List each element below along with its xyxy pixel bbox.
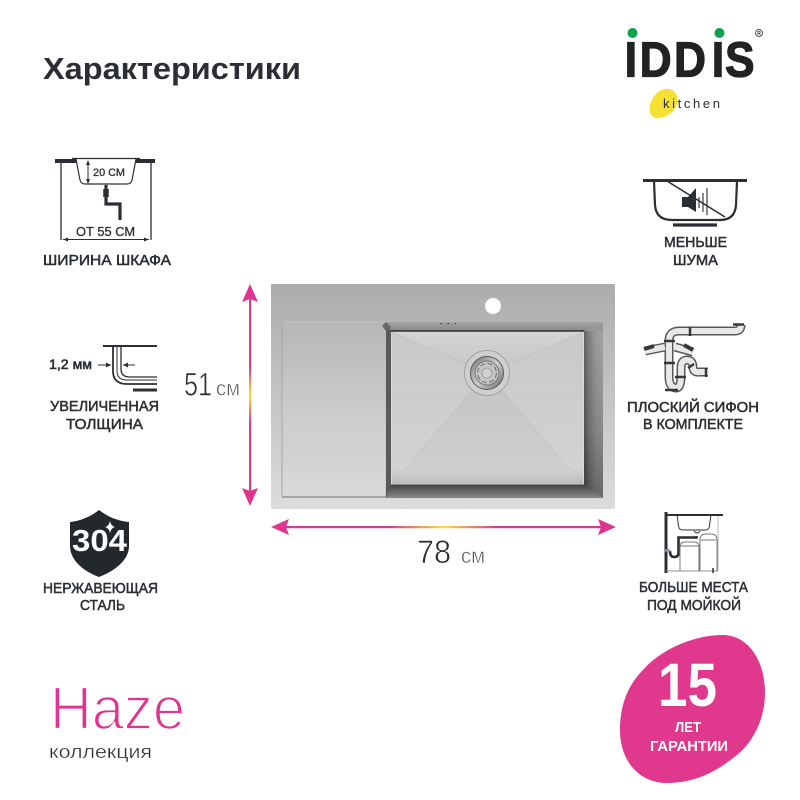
icon: steel profile (98, 346, 157, 390)
caption: collection: коллекция (49, 742, 152, 762)
icon block: flat siphon (627, 324, 759, 433)
sink plate (271, 284, 615, 509)
dimension: height 51 cm: 51 (184, 366, 212, 402)
badge text line 2: ГАРАНТИИ (650, 738, 728, 755)
icon block: more space under sink (639, 512, 748, 614)
dimension: height 51 cm: см (216, 378, 240, 400)
tap hole (485, 298, 501, 314)
logo yellow blob (650, 89, 678, 118)
dimension: width 78 cm (417, 534, 485, 570)
drainboard (282, 322, 386, 497)
title: Характеристики (43, 51, 301, 86)
icon: sparkle (105, 521, 115, 533)
bowl walls (382, 322, 603, 498)
badge: 15 year warranty (620, 635, 765, 783)
logo green dots (628, 28, 724, 38)
dimension: 20 cm: 20 СМ (93, 167, 125, 179)
label line 2: В КОМПЛЕКТЕ (643, 417, 743, 433)
label line 2: ШУМА (673, 253, 718, 269)
product: sink top view (271, 284, 615, 509)
logo kitchen word: kitchen (663, 96, 720, 111)
dimension: from 55 cm: ОТ 55 СМ (76, 224, 135, 239)
label line 1: БОЛЬШЕ МЕСТА (639, 580, 748, 596)
dimension: width 78 cm: 78 (417, 534, 451, 570)
label line 2: СТАЛЬ (80, 598, 125, 614)
icon block: increased thickness (49, 346, 159, 433)
icon: shield (70, 510, 129, 577)
icon: cabinet with storage (665, 512, 723, 573)
label line 1: УВЕЛИЧЕННАЯ (50, 399, 159, 415)
label line 2: ПОД МОЙКОЙ (647, 596, 741, 614)
collection name (49, 675, 185, 762)
badge number: 15 (658, 651, 717, 719)
dimension: height 51 cm (184, 366, 240, 402)
label line 1: ПЛОСКИЙ СИФОН (627, 398, 759, 416)
dimension: width 78 cm: см (461, 545, 485, 568)
logo registered mark: R (757, 31, 761, 37)
icon: siphon (644, 324, 744, 390)
icon: muted sink (643, 180, 747, 225)
icon: sink in cabinet (55, 158, 155, 242)
label line 1: МЕНЬШЕ (664, 235, 727, 251)
logo: IDDIS kitchen (625, 28, 762, 118)
badge blob (620, 635, 765, 783)
heading: Haze: Haze (50, 675, 185, 742)
dimension: 1.2 mm: 1,2 мм (49, 356, 92, 372)
icon block: cabinet width (43, 158, 171, 269)
label line 1: НЕРЖАВЕЮЩАЯ (43, 581, 158, 597)
logo wordmark: IDDIS (625, 32, 754, 87)
label: cabinet width: ШИРИНА ШКАФА (43, 253, 171, 269)
badge text line 1: ЛЕТ (675, 719, 701, 736)
arrow: height (242, 284, 258, 506)
icon block: stainless steel 304 (43, 510, 158, 614)
shield value 304: 304 (72, 523, 128, 558)
icon block: less noise (643, 180, 747, 269)
label line 2: ТОЛЩИНА (66, 417, 143, 433)
drain strainer (464, 350, 510, 396)
arrow: width (271, 519, 616, 535)
bowl floor (391, 331, 584, 485)
small marks on top wall (440, 322, 456, 324)
